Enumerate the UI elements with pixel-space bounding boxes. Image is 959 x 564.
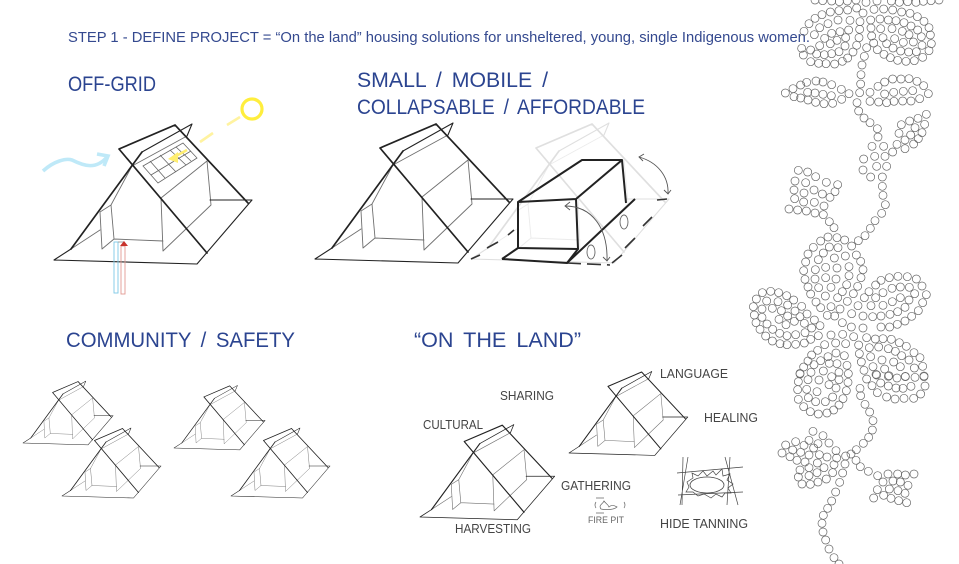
labels: on the land activities: SHARING	[500, 389, 554, 403]
labels: on the land activities: HARVESTING	[455, 522, 531, 536]
panel: community tents	[23, 381, 330, 498]
beads: upper section	[781, 0, 943, 190]
icon: tent	[315, 123, 513, 263]
heading: small mobile collapsable affordable: SMALL / MOBILE /	[357, 69, 548, 92]
labels: on the land activities: HEALING	[704, 411, 758, 425]
icon: collapsed box	[502, 160, 635, 263]
labels: on the land activities: CULTURAL	[423, 418, 483, 432]
heading: off-grid: OFF-GRID	[68, 73, 156, 96]
heading: community safety: COMMUNITY / SAFETY	[66, 329, 295, 352]
panel: on the land tents	[420, 371, 688, 520]
arrow: folding arcs	[565, 154, 671, 261]
icon: fire pit	[588, 498, 625, 525]
arrow: wind	[43, 154, 108, 171]
icon: sun	[242, 99, 262, 119]
icon: solar panel	[143, 143, 197, 183]
icon: fire pit: FIRE PIT	[588, 515, 624, 525]
beaded floral border	[749, 0, 943, 564]
title: STEP 1 - DEFINE PROJECT = “On the land” housing solutions for unsheltered, young, single Indigenous women.	[68, 30, 810, 46]
icon: hide tanning frame	[677, 457, 743, 505]
beads: lower section	[778, 370, 929, 564]
labels: on the land activities: GATHERING	[561, 479, 631, 493]
heading: small mobile collapsable affordable	[357, 69, 645, 119]
icon: water pipes	[114, 241, 128, 294]
icon: dashed ground	[471, 199, 667, 265]
heading: on the land: “ON THE LAND”	[414, 329, 581, 352]
icon: ghost tent outline	[471, 123, 669, 263]
icon: wheels	[587, 215, 628, 259]
icon: tent	[54, 124, 252, 264]
labels: on the land activities: HIDE TANNING	[660, 517, 748, 531]
heading: small mobile collapsable affordable: COLLAPSABLE / AFFORDABLE	[357, 96, 645, 119]
arrow: sunlight	[168, 117, 240, 163]
labels: on the land activities	[423, 367, 758, 536]
beads: middle section	[749, 186, 930, 380]
labels: on the land activities: LANGUAGE	[660, 367, 728, 381]
panel: collapsable tent illustration	[315, 123, 671, 265]
panel: off-grid tent illustration	[43, 99, 262, 294]
